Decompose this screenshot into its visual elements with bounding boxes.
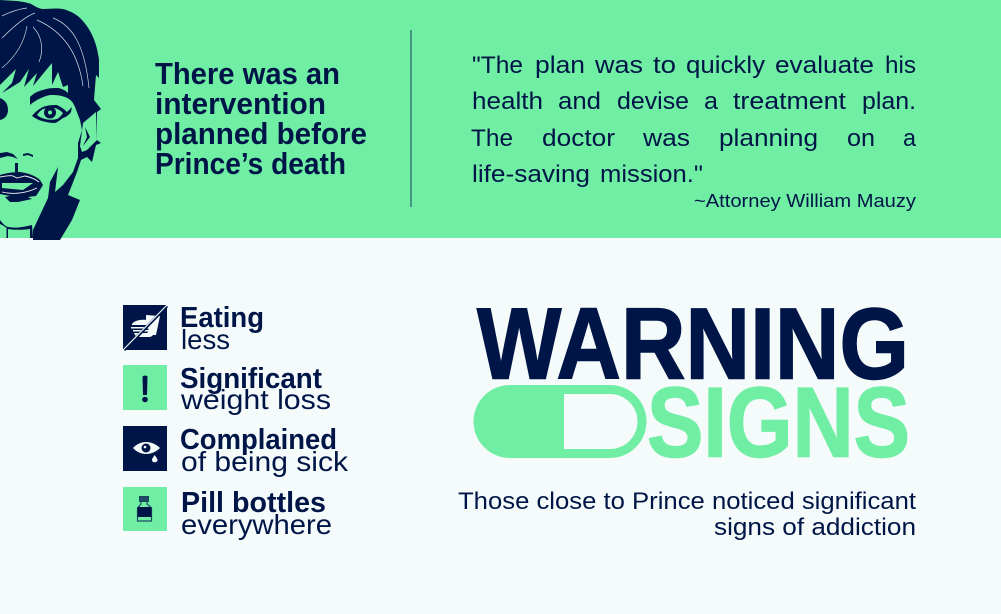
label: significant weight loss: weight loss	[180, 384, 331, 415]
mouth and goatee	[0, 172, 43, 202]
caption: signs of addiction	[714, 514, 916, 541]
heading: signs: SIGNS	[647, 366, 910, 478]
label: pill bottles everywhere	[181, 487, 332, 540]
hair highlights	[2, 8, 89, 88]
heading: intervention: There was an	[155, 56, 340, 91]
icon: pill bottle	[123, 487, 167, 531]
quote text: plan.	[862, 88, 916, 115]
label: complained of being sick	[180, 424, 349, 477]
quote text: health	[472, 88, 543, 115]
heading: intervention: intervention	[155, 86, 326, 121]
label: eating less	[180, 302, 264, 355]
quote text: mission."	[600, 161, 703, 188]
quote text: quickly	[686, 52, 765, 79]
quote text: a	[903, 125, 917, 152]
label: pill bottles everywhere: everywhere	[181, 509, 332, 540]
hair and sideburn	[0, 0, 101, 240]
panel: warning signs list	[123, 302, 349, 540]
quote text: evaluate	[775, 52, 874, 79]
label: significant weight loss: Significant	[180, 363, 322, 395]
quote text: planning	[719, 125, 818, 152]
quote text: was	[642, 125, 690, 152]
far eye	[0, 98, 8, 120]
ear	[80, 112, 97, 152]
quote text: a	[704, 88, 719, 115]
quote text: "The	[472, 52, 523, 79]
quote text: devise	[617, 88, 689, 115]
heading: intervention	[155, 56, 367, 181]
heading: warning: WARNING	[477, 288, 909, 400]
jaw line and neck	[0, 220, 33, 238]
label: significant weight loss	[180, 363, 331, 415]
quote text: The	[471, 125, 513, 152]
quote text	[471, 52, 917, 188]
caption	[458, 488, 916, 541]
icon: pill capsule	[474, 385, 646, 458]
quote text: doctor	[542, 125, 615, 152]
label: complained of being sick: Complained	[180, 424, 337, 456]
quote text: on	[847, 125, 875, 152]
label: complained of being sick: of being sick	[181, 446, 349, 477]
quote text: and	[558, 88, 601, 115]
quote text: to	[653, 52, 676, 79]
quote text: was	[594, 52, 643, 79]
icon: eye with tear	[123, 426, 167, 471]
eye	[32, 105, 72, 123]
quote attribution: ~Attorney William Mauzy	[694, 190, 917, 211]
icon: exclamation mark	[123, 365, 167, 410]
quote text: plan	[535, 52, 585, 79]
label: eating less: Eating	[180, 302, 264, 334]
eyebrow	[30, 88, 73, 105]
panel: warning signs title	[458, 288, 916, 541]
illustration: face portrait	[0, 0, 101, 240]
quote text: his	[885, 52, 916, 79]
caption: Those close to Prince noticed significant	[458, 488, 916, 515]
heading: intervention: planned before	[155, 116, 367, 151]
quote text: treatment	[733, 88, 846, 115]
panel: top banner	[0, 0, 1001, 240]
label: eating less: less	[181, 324, 230, 355]
quote text: life-saving	[472, 161, 590, 188]
icon: burger crossed out	[123, 305, 167, 350]
heading: intervention: Prince’s death	[155, 146, 346, 181]
label: pill bottles everywhere: Pill bottles	[181, 487, 326, 519]
nose	[0, 152, 33, 172]
